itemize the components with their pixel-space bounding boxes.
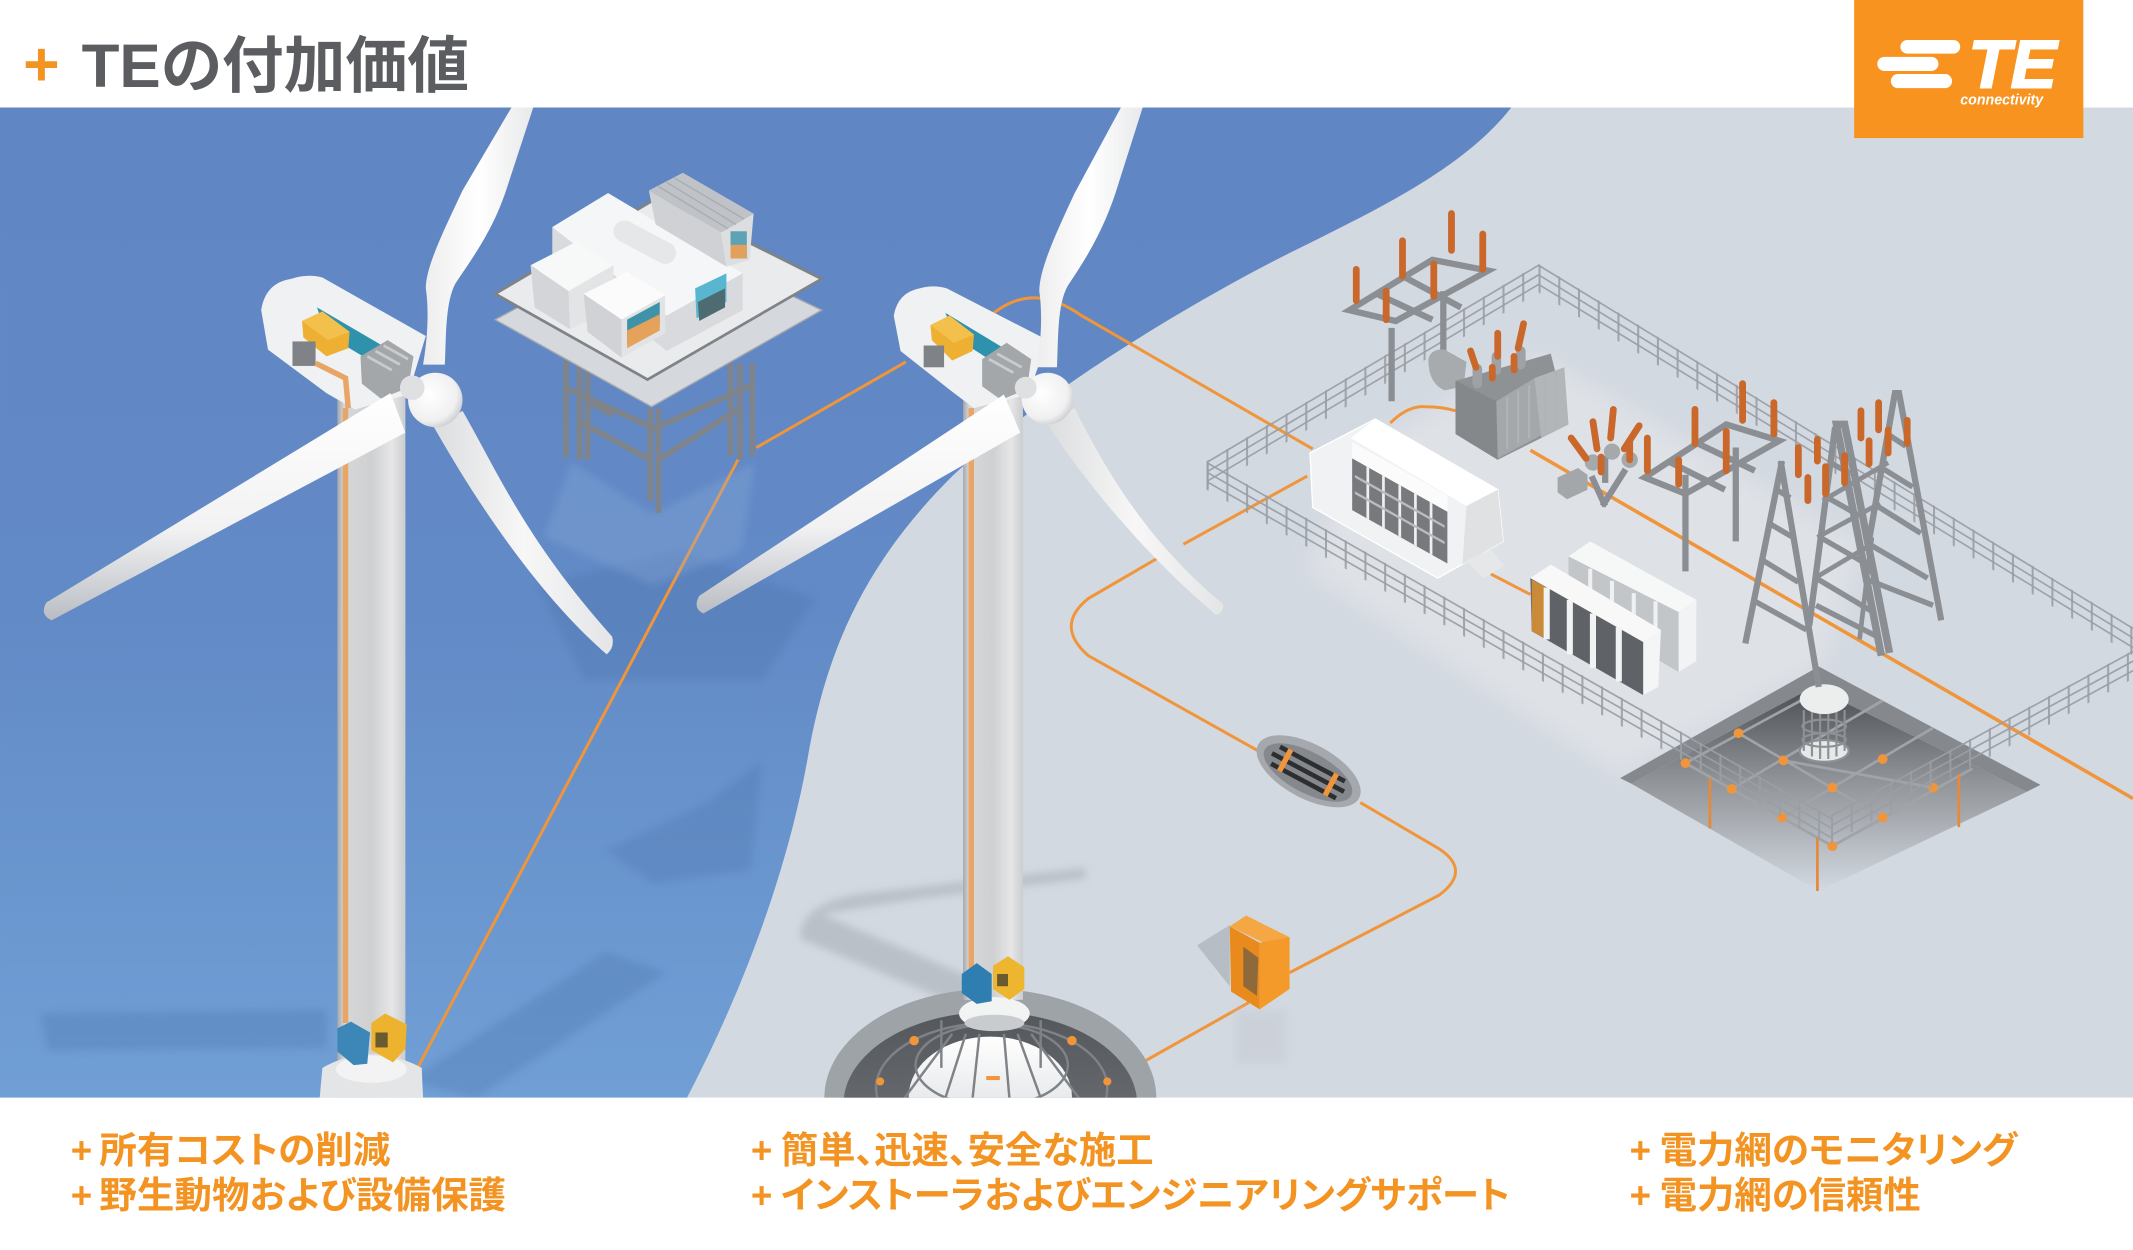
blade left	[44, 393, 405, 620]
cabinets: front row	[1530, 565, 1661, 695]
cable: substation main line	[1390, 407, 2133, 799]
benefits: centre column	[751, 1130, 1510, 1216]
grey cabinet in nacelle	[924, 346, 944, 367]
fence: substation perimeter back	[1207, 265, 2133, 648]
header background	[0, 0, 2133, 107]
junction box: orange	[1197, 916, 1290, 1014]
turbine 2	[697, 107, 1223, 1031]
disconnect switch with bushings	[1558, 409, 1639, 506]
foundation orange connectors	[876, 1036, 1111, 1086]
grounding grid lines	[1685, 694, 1972, 846]
benefits: left column	[71, 1130, 506, 1216]
steps	[1468, 552, 1492, 574]
logo: TE connectivity: connectivity	[1960, 92, 2044, 109]
manhole with cable joints	[1256, 735, 1361, 808]
building block centre	[584, 272, 665, 358]
switchgear panels	[1352, 442, 1447, 563]
legs and braces	[566, 360, 752, 513]
yellow cabinet	[993, 956, 1024, 1000]
benefits: right column	[1630, 1130, 2018, 1216]
pit: cable trench with grounding grid	[1620, 667, 2040, 898]
hub	[400, 373, 463, 427]
blade up	[1037, 107, 1143, 367]
teal drive bar	[317, 308, 380, 356]
base collar	[959, 997, 1030, 1031]
benefits: centre column: 簡単、迅速、安全な施工	[781, 1130, 1154, 1171]
lattice towers	[1745, 393, 1941, 687]
yellow cabinet in nacelle	[302, 312, 350, 356]
nacelle	[894, 286, 1047, 408]
yellow cabinet	[371, 1013, 407, 1062]
cable: turbine 2 to substation, manhole, junction box and foundation	[990, 298, 1456, 1081]
turbine 1	[44, 107, 613, 1098]
reflection	[544, 463, 755, 585]
benefits: centre column: +	[751, 1175, 772, 1216]
offshore platform	[495, 173, 822, 585]
benefits: left column: 所有コストの削減	[99, 1130, 391, 1171]
tower foot disc	[1800, 684, 1849, 714]
building block left	[531, 242, 614, 329]
cage	[876, 1020, 1107, 1154]
switchgear panel right	[695, 273, 726, 321]
title: TEの付加価値	[82, 32, 469, 100]
hub	[1015, 373, 1073, 424]
blue cabinet	[337, 1022, 370, 1065]
upper deck	[495, 197, 822, 380]
land background	[687, 108, 2133, 1098]
nacelle cable	[316, 363, 348, 408]
benefits: right column: +	[1630, 1175, 1651, 1216]
benefits: left column: 野生動物および設備保護	[99, 1175, 506, 1216]
foundation dome	[909, 1037, 1072, 1156]
container: switchgear enclosure	[1310, 419, 1505, 578]
switchgear detail	[627, 302, 660, 344]
back container with slats	[649, 173, 754, 267]
gantry: right with orange insulators	[1645, 384, 1779, 571]
grounding rods	[1710, 774, 1959, 891]
blue cabinet	[962, 963, 992, 1004]
blade up	[423, 107, 533, 365]
gearbox	[982, 343, 1031, 400]
benefits: left column: +	[71, 1175, 92, 1216]
benefits: right column: 電力網のモニタリング	[1660, 1130, 2018, 1171]
gearbox	[360, 340, 414, 399]
turbine 2 foundation	[824, 989, 1156, 1207]
footer background	[0, 1098, 2133, 1250]
cage under tower foot	[1800, 710, 1849, 762]
grounding nodes	[1681, 728, 1938, 851]
tower	[337, 394, 405, 1098]
transformer with bushings	[1428, 324, 1568, 460]
roof tank	[624, 231, 665, 253]
benefits: right column: 電力網の信頼性	[1660, 1175, 1921, 1216]
tower	[963, 394, 1023, 1000]
fence: substation perimeter front	[1207, 463, 2133, 837]
shadow of turbine on land	[800, 868, 1086, 1003]
substation lit ground	[1319, 378, 1852, 764]
cable: turbine to platform and turbine 2	[418, 362, 906, 1068]
title: +	[23, 30, 60, 100]
blade lower right	[1047, 408, 1223, 615]
lattice tower insulators	[1798, 403, 1907, 501]
logo: TE connectivity: TE	[1968, 27, 2059, 103]
benefits: centre column: インストーラおよびエンジニアリングサポート	[781, 1175, 1510, 1216]
blade lower right	[434, 411, 613, 654]
cabinets: back row	[1568, 541, 1696, 672]
logo: TE connectivity	[1854, 0, 2083, 138]
benefits: left column: +	[71, 1130, 92, 1171]
benefits: right column: +	[1630, 1130, 1651, 1171]
tower cable	[969, 408, 974, 969]
gantry: upper left with orange insulators	[1349, 214, 1488, 401]
nacelle	[261, 276, 426, 409]
teal bar	[945, 313, 1004, 362]
lower deck	[495, 231, 822, 407]
shadows on sea	[41, 551, 816, 1098]
main building	[552, 193, 743, 351]
grey cabinet in nacelle	[292, 341, 316, 366]
base collar	[320, 1054, 423, 1098]
benefits: centre column: +	[751, 1130, 772, 1171]
sea background	[0, 107, 1511, 1098]
yellow cabinet in nacelle	[930, 316, 974, 360]
blade left	[697, 394, 1020, 614]
tower cable	[343, 408, 348, 1023]
